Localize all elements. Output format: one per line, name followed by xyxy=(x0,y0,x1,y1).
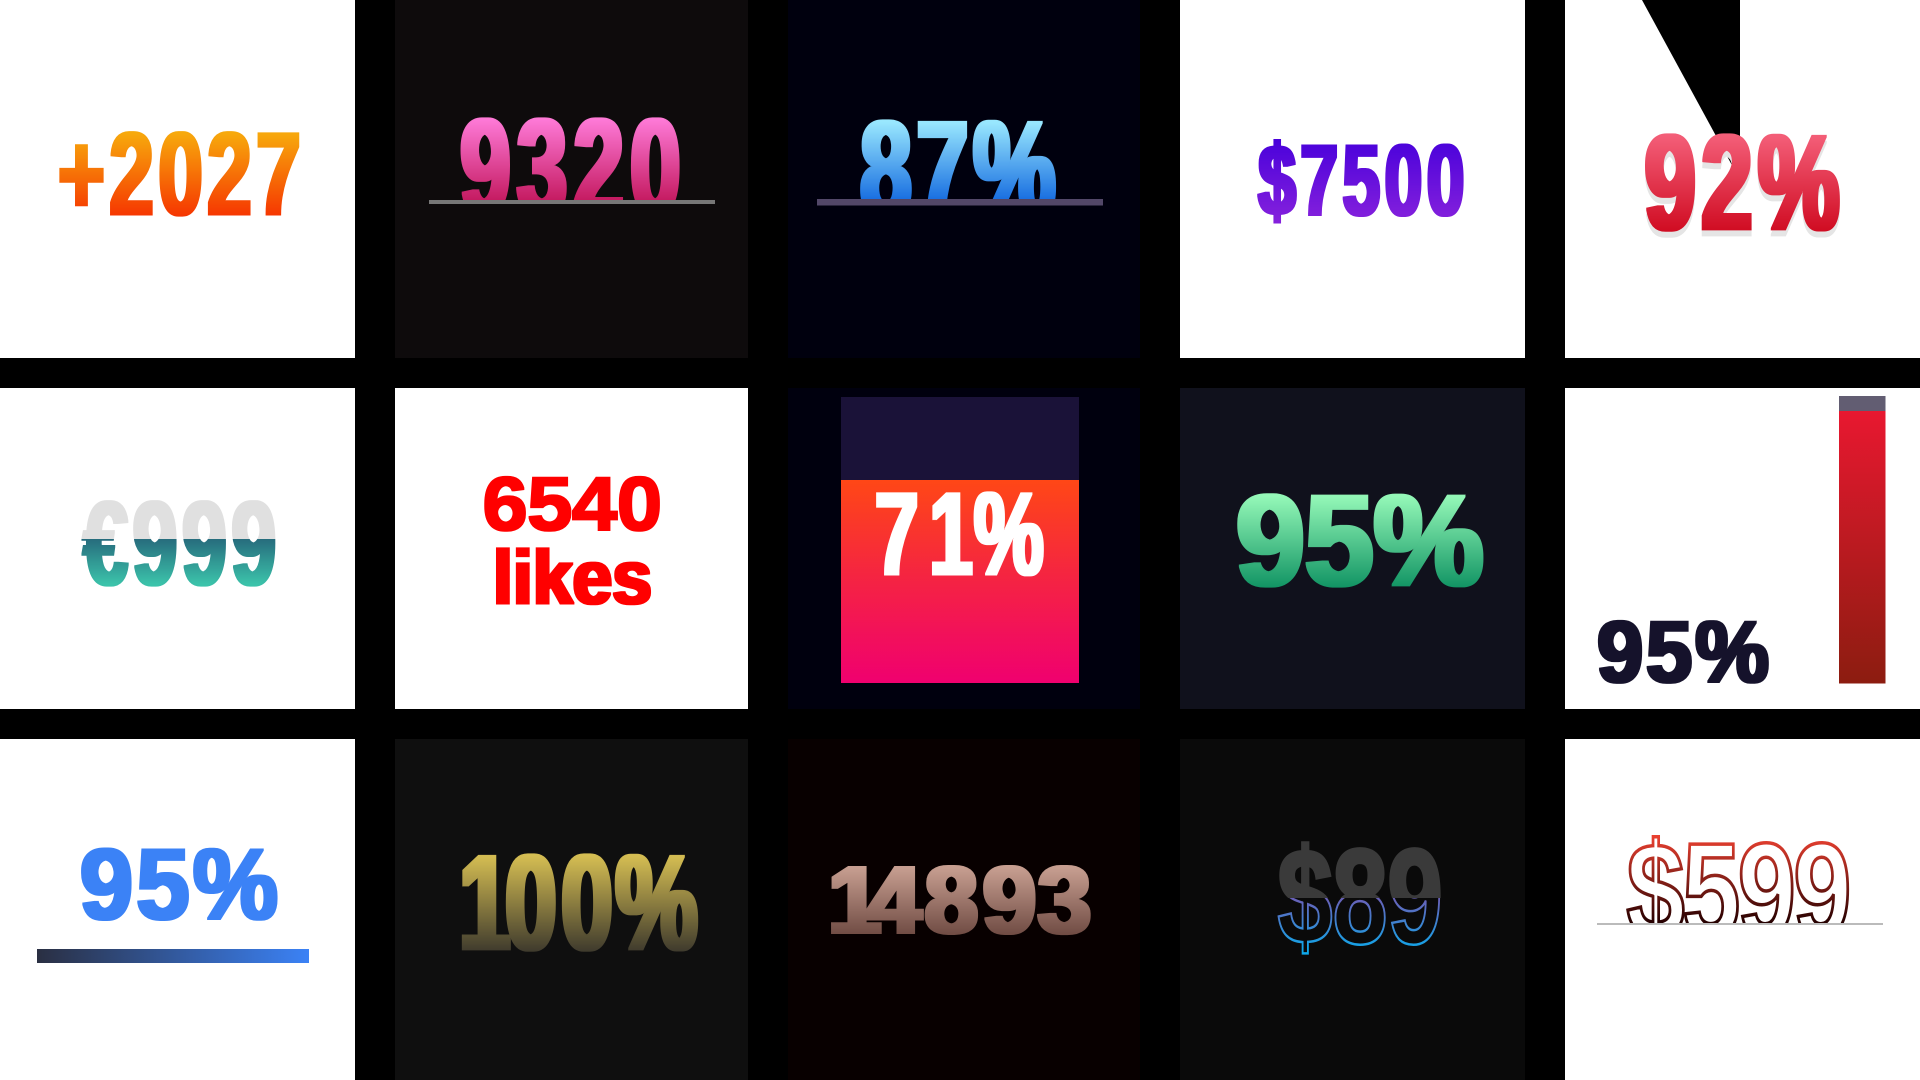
progress bar xyxy=(37,949,309,963)
panel: 95% blue with horizontal bar xyxy=(0,739,355,1080)
panel background xyxy=(1565,739,1920,1080)
number: $599: $599 xyxy=(1626,815,1849,966)
panel background xyxy=(395,739,748,1080)
panel: +2027 orange xyxy=(0,0,355,358)
number: 100%: 100% xyxy=(459,826,698,978)
number: €999 lower teal half: €999 xyxy=(83,478,281,611)
panel: €999 split fill xyxy=(0,388,355,709)
panel: 95% with vertical bar xyxy=(1565,388,1920,709)
panel background xyxy=(0,739,355,1080)
panel: 6540 likes xyxy=(395,388,748,709)
gauge fill xyxy=(841,480,1079,683)
panel: $599 outline on line xyxy=(1565,739,1920,1080)
panel: 87% blue on line xyxy=(788,0,1140,358)
panel background xyxy=(1180,0,1525,358)
bar track xyxy=(1839,396,1886,411)
gauge track xyxy=(841,397,1079,480)
number: 87%: 87% xyxy=(860,92,1061,244)
panel background xyxy=(788,388,1140,709)
baseline rule xyxy=(429,200,715,204)
number: $89 outlined lower half: $89 xyxy=(1277,821,1442,972)
panel: 9320 pink on line xyxy=(395,0,748,358)
baseline rule xyxy=(817,199,1103,206)
panel: $89 outline split xyxy=(1180,739,1525,1080)
number shadow: 92% xyxy=(1645,112,1845,264)
number: €999 upper gray half: €999 xyxy=(83,478,281,611)
panel background xyxy=(0,0,355,358)
baseline rule xyxy=(1597,923,1883,925)
number: $89 solid upper half: $89 xyxy=(1277,821,1442,972)
number: 14893: 14893 xyxy=(828,847,1091,954)
number: 9320: 9320 xyxy=(460,90,687,242)
bar fill xyxy=(1839,411,1886,684)
panel background xyxy=(1180,739,1525,1080)
panel background xyxy=(0,388,355,709)
panel: 95% green xyxy=(1180,388,1525,709)
number: 6540: 6540 xyxy=(482,462,661,547)
panel: $7500 violet xyxy=(1180,0,1525,358)
panel background xyxy=(395,388,748,709)
panel background xyxy=(1565,0,1920,358)
number: 95%: 95% xyxy=(1236,467,1484,613)
number: $7500: $7500 xyxy=(1258,125,1469,237)
panel background xyxy=(788,739,1140,1080)
panel background xyxy=(788,0,1140,358)
label: likes: likes xyxy=(493,536,652,620)
number: 95%: 95% xyxy=(1597,603,1772,701)
number: 92%: 92% xyxy=(1645,106,1845,258)
number: +2027: +2027 xyxy=(58,109,305,241)
panel: 14893 dusty rose xyxy=(788,739,1140,1080)
panel: 71% fill gauge xyxy=(788,388,1140,709)
panel background xyxy=(1180,388,1525,709)
panel background xyxy=(395,0,748,358)
black triangle xyxy=(1642,0,1740,180)
panel background xyxy=(1565,388,1920,709)
number: 95%: 95% xyxy=(80,829,281,941)
panel: 100% gold xyxy=(395,739,748,1080)
panel: 92% red with shadow xyxy=(1565,0,1920,358)
number: 71%: 71% xyxy=(875,469,1044,601)
